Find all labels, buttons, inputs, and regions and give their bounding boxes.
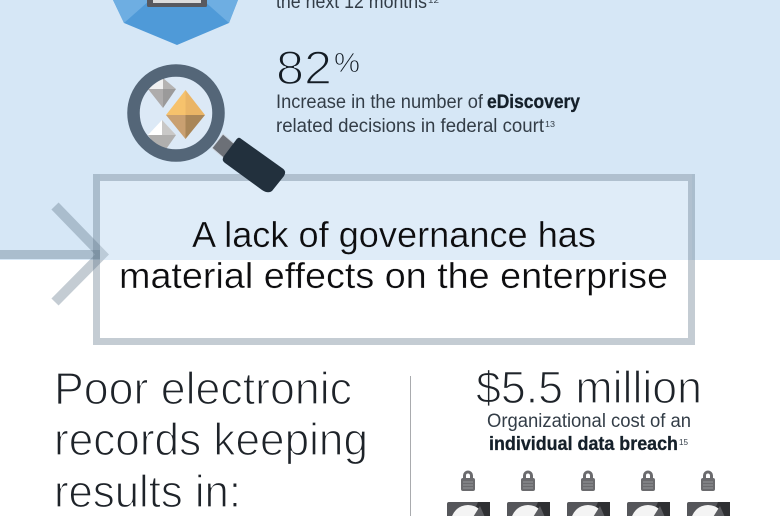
- icon: locked drive 3: [567, 472, 610, 516]
- arrow pointing into heading box: [0, 206, 102, 302]
- statistic: $5.5 million data breach cost: [476, 362, 702, 455]
- heading: poor electronic records keeping results in: records keeping: [54, 414, 368, 465]
- number 82 percent: %: [334, 47, 360, 78]
- description text: individual data breach: [489, 434, 678, 455]
- description text: 15: [679, 438, 689, 447]
- description text: 13: [545, 120, 556, 129]
- vertical divider: [410, 376, 411, 516]
- icon row: locked hard drives: [447, 472, 730, 516]
- icon: locked drive 4: [627, 472, 670, 516]
- description text: [487, 411, 691, 455]
- heading: poor electronic records keeping results in: results in:: [54, 466, 241, 516]
- description text: [276, 92, 580, 137]
- magnifier ring: [134, 70, 218, 156]
- description text: eDiscovery: [487, 92, 580, 113]
- heading box: [96, 174, 692, 342]
- number 82 percent: [276, 41, 360, 94]
- magnifier handle: [212, 134, 285, 192]
- heading: poor electronic records keeping results in: Poor electronic: [54, 363, 352, 414]
- description text: Organizational cost of an: [487, 411, 691, 432]
- heading text: [119, 214, 668, 296]
- description text: related decisions in federal court: [276, 116, 545, 137]
- heading: poor electronic records keeping results in: [54, 363, 368, 516]
- lens interior with diamonds: [148, 78, 205, 148]
- icon: locked drive 2: [507, 472, 550, 516]
- blue background panel: [0, 0, 780, 260]
- statistic: 82% eDiscovery decisions: [276, 41, 580, 137]
- number 82 percent: 82: [276, 41, 332, 94]
- heading text: A lack of governance has: [192, 214, 596, 255]
- icon: document on blue shield: [113, 0, 238, 45]
- heading text: material effects on the enterprise: [119, 255, 668, 296]
- icon: magnifying glass over diamonds: [134, 70, 285, 192]
- icon: locked drive 1: [447, 472, 490, 516]
- number $5.5 million: $5.5 million: [476, 362, 702, 413]
- description text: Increase in the number of: [276, 92, 484, 113]
- icon: locked drive 5: [687, 472, 730, 516]
